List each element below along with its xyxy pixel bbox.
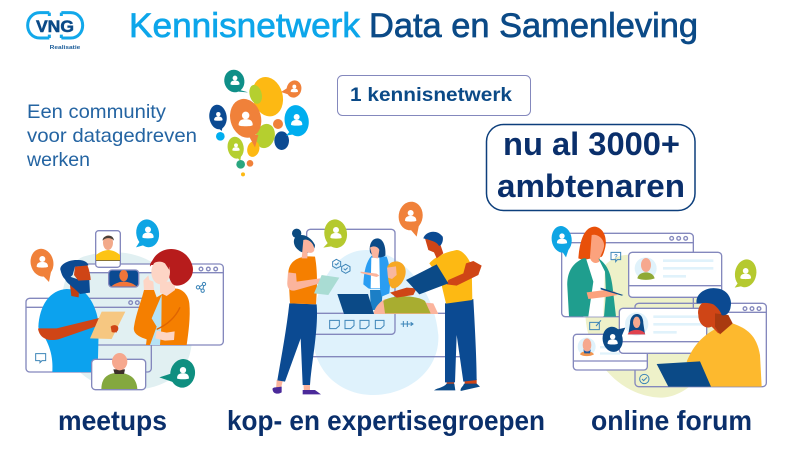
icon: question bubble	[611, 252, 621, 262]
icon: check chat	[640, 374, 649, 384]
illustration: meetups	[26, 217, 223, 390]
label: online forum: online forum	[591, 405, 752, 436]
callout: 1 kennisnetwerk	[338, 76, 530, 116]
icon: chat	[36, 354, 46, 363]
card: forum post three	[619, 308, 707, 353]
icon: community speech bubbles	[208, 67, 311, 176]
icon: question bubble: ?	[614, 255, 618, 261]
video tile: bald man	[92, 353, 146, 390]
title: Kennisnetwerk	[129, 7, 361, 45]
intro text: Een community	[27, 101, 166, 123]
icon: check badges	[333, 259, 350, 273]
logo: VNG Realisatie: Realisatie	[50, 45, 80, 51]
intro text: werken	[26, 149, 90, 171]
figure: man in yellow with folder	[390, 232, 482, 391]
card: forum post one	[629, 252, 722, 297]
icon: write note	[590, 320, 601, 330]
logo: VNG Realisatie	[28, 13, 83, 51]
figure: man in yellow with laptop	[657, 288, 762, 387]
figure: woman with red hair	[134, 249, 193, 345]
figure: seated man	[373, 261, 438, 314]
callout: 1 kennisnetwerk: 1 kennisnetwerk	[350, 85, 512, 106]
icon: navy person bubble	[601, 325, 625, 354]
icon: lime person bubble	[733, 258, 759, 289]
icon: flow arrows	[401, 321, 413, 327]
figure: woman in teal	[567, 227, 623, 317]
icon: orange person bubble	[28, 247, 56, 282]
icon: orange person bubble	[397, 200, 425, 237]
intro text: voor datagedreven	[27, 125, 197, 147]
laptop	[337, 294, 374, 314]
callout: nu al 3000+ ambtenaren: ambtenaren	[497, 168, 685, 204]
callout: nu al 3000+ ambtenaren	[486, 124, 695, 210]
intro text	[26, 101, 197, 171]
figure: standing woman in jacket	[361, 238, 390, 310]
label: kop- en expertisegroepen: kop- en expertisegroepen	[227, 405, 545, 436]
title	[129, 7, 698, 45]
figure: bearded man	[38, 260, 125, 372]
card: forum post two	[573, 334, 647, 370]
illustration: kop- en expertisegroepen	[273, 200, 482, 395]
icon: sticky notes	[330, 320, 384, 329]
illustration: online forum	[550, 225, 766, 398]
video tile: man in yellow	[96, 231, 120, 267]
logo: VNG Realisatie: VNG	[36, 18, 74, 36]
icon: blue person bubble	[550, 225, 573, 257]
icon: teal person bubble	[159, 357, 197, 390]
icon: network nodes	[196, 282, 206, 292]
title: Data en Samenleving	[369, 7, 698, 45]
callout: nu al 3000+ ambtenaren: nu al 3000+	[503, 126, 680, 162]
icon: blue person bubble	[134, 217, 162, 249]
video tile: woman	[109, 270, 139, 287]
icon: lime person bubble	[322, 218, 349, 249]
figure: woman with tablet	[273, 229, 339, 394]
label: meetups: meetups	[58, 405, 167, 436]
